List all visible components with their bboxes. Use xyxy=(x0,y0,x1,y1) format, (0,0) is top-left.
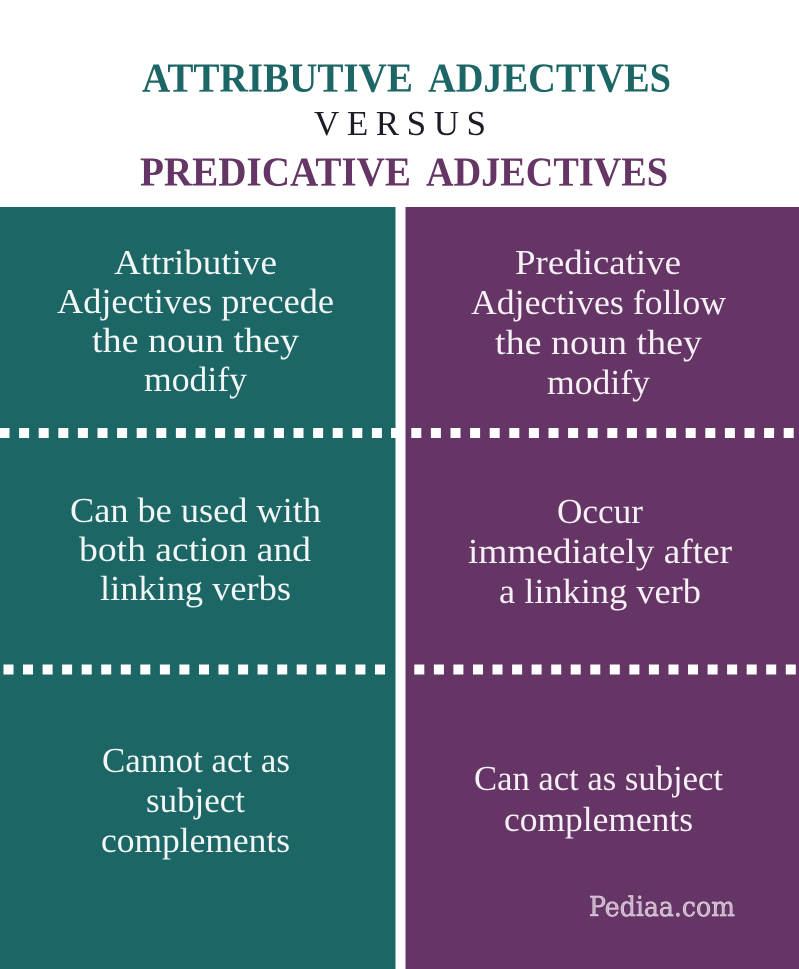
title block xyxy=(140,54,671,194)
text: attributive verbs xyxy=(70,491,322,608)
text: attributive verbs: linking verbs xyxy=(100,569,291,608)
text: attributive position: the noun they xyxy=(92,321,300,360)
text: predicative verbs: a linking verb xyxy=(499,572,701,611)
text: predicative complements xyxy=(474,759,723,839)
logo: Pediaa.com: Pediaa.com xyxy=(589,892,735,923)
text: attributive complements xyxy=(101,741,290,860)
text: attributive complements: complements xyxy=(101,821,290,860)
panel: attributive adjectives column xyxy=(0,207,396,969)
heading: versus: VERSUS xyxy=(314,104,486,143)
text: predicative verbs: immediately after xyxy=(468,532,732,571)
text: attributive position xyxy=(57,243,334,399)
text: attributive verbs: Can be used with xyxy=(70,491,322,530)
divider: first row of squares xyxy=(0,428,794,438)
text: predicative position: the noun they xyxy=(495,323,703,362)
text: predicative verbs: Occur xyxy=(557,492,643,531)
text: attributive complements: subject xyxy=(146,781,245,820)
center white gutter xyxy=(396,207,406,969)
text: predicative position: Predicative xyxy=(515,243,681,282)
text: predicative complements: complements xyxy=(504,800,693,839)
text: attributive position: Attributive xyxy=(114,243,277,282)
heading: predicative adjectives: ADJECTIVES xyxy=(426,148,668,194)
heading: attributive adjectives: ADJECTIVES xyxy=(428,54,671,100)
text: predicative position: Adjectives follow xyxy=(471,283,727,322)
text: attributive complements: Cannot act as xyxy=(102,741,290,780)
text: attributive position: modify xyxy=(144,360,248,399)
panel: predicative adjectives column xyxy=(406,207,799,969)
text: predicative complements: Can act as subject xyxy=(474,759,723,798)
text: attributive verbs: both action and xyxy=(79,530,312,569)
text: predicative position: modify xyxy=(547,363,651,402)
heading: attributive adjectives: ATTRIBUTIVE xyxy=(142,54,413,100)
text: predicative position xyxy=(471,243,727,402)
divider: second row of squares xyxy=(4,664,796,674)
text: predicative verbs xyxy=(468,492,732,611)
heading: predicative adjectives: PREDICATIVE xyxy=(140,148,411,194)
text: attributive position: Adjectives precede xyxy=(57,282,334,321)
